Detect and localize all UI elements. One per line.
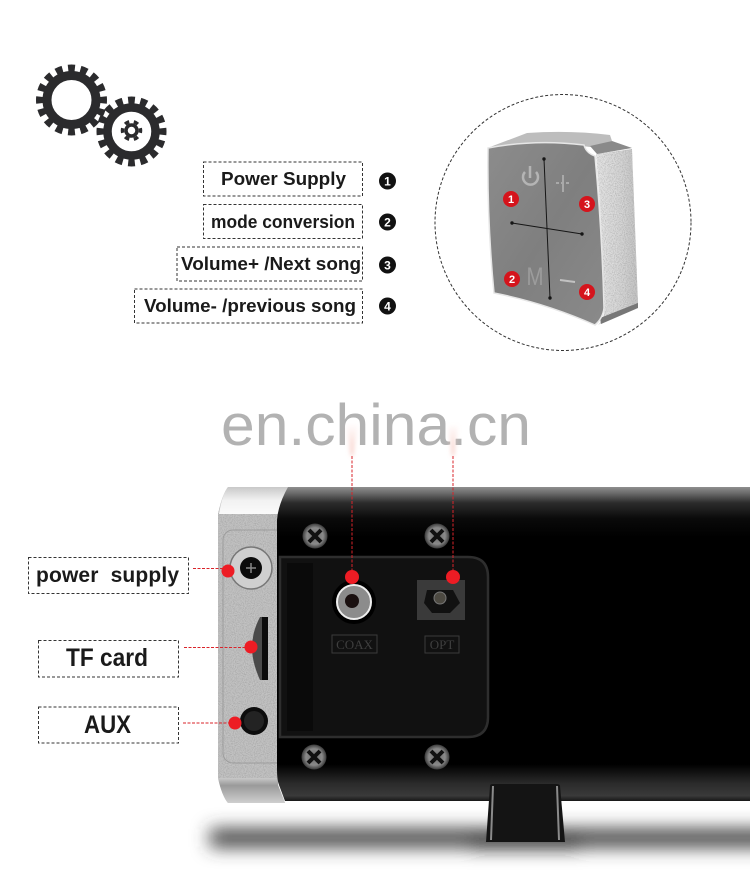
control panel face [488,143,604,325]
silver end cap [218,487,288,803]
screw top right [424,524,450,548]
leader: COAX [345,424,359,584]
screw bottom left [302,744,326,770]
badge 4 [579,284,595,300]
bullet 2: 2 [384,216,391,230]
bullet 1: 1 [384,174,391,188]
label: Volume+ /Next song: Volume+ /Next song [181,254,361,274]
label: Volume- /previous song: Volume- /previous song [144,296,356,316]
power jack [230,547,272,589]
watermark: en.china.cn [221,393,531,458]
soundbar [218,487,750,842]
OPT label: OPT [430,637,454,652]
badge 1 [503,191,519,207]
bullet 3 [379,256,396,274]
badge 1: 1 [508,194,514,206]
icon: M: M [526,263,544,291]
label: mode conversion: mode conversion [211,212,355,232]
COAX label [332,635,377,653]
cross lines [511,158,583,299]
OPT port [417,580,465,620]
icon: power [523,166,538,185]
port panel [280,557,488,737]
TF slot [252,617,268,680]
label: power supply [28,558,188,594]
dashed circle callout: control panel [435,94,691,350]
label: TF card: TF card [66,644,148,672]
floor shadow [210,829,750,848]
OPT label [425,636,459,653]
badge 3 [579,196,595,212]
label: AUX [38,707,178,743]
label: power supply: power supply [36,564,179,587]
foot [486,784,565,842]
badge 4: 4 [584,287,591,299]
bullet 1 [379,172,396,190]
control panel top edge [490,132,612,147]
badge 2 [504,271,520,287]
label: mode conversion [204,204,362,238]
badge 3: 3 [584,199,590,211]
badge 2: 2 [509,274,515,286]
label: TF card [38,640,178,677]
leader: AUX [183,716,242,730]
leader: power supply [193,564,234,578]
icon: gears [40,68,162,162]
black body [277,487,750,801]
label: Power Supply: Power Supply [221,169,346,189]
screw top left [302,524,328,548]
COAX jack [332,580,376,624]
bullet 4 [379,298,396,314]
bullet 3: 3 [384,258,391,272]
label: Volume+ /Next song [177,247,362,281]
leader: TF card [184,640,258,654]
leader: OPT [446,426,460,584]
icon: minus [560,280,575,282]
label: AUX: AUX [84,711,131,739]
label: Volume- /previous song [134,289,362,323]
bullet 4: 4 [384,300,391,314]
AUX jack [240,707,268,735]
screw bottom right [424,744,450,770]
COAX label: COAX [336,637,374,652]
control panel side [596,149,638,325]
bullet 2 [379,214,396,230]
icon: plus [556,175,571,192]
label: Power Supply [204,162,362,196]
